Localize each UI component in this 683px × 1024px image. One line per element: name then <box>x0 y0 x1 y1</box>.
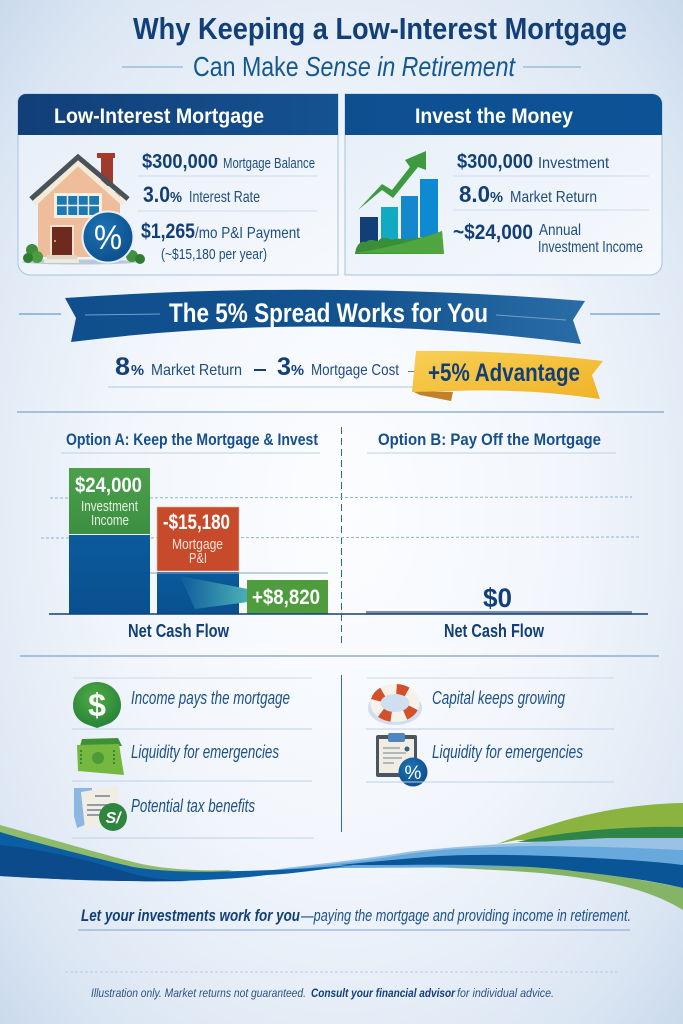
row: monthly payment: $1,265 <box>141 220 195 243</box>
panel heading: Low-Interest Mortgage <box>54 105 264 128</box>
bar: mortgage p&i: -$15,180 <box>163 511 230 534</box>
row: investment <box>457 151 609 173</box>
row: mortgage balance: Mortgage Balance <box>223 155 315 172</box>
row: monthly payment <box>141 220 300 263</box>
row: interest rate: % <box>170 189 182 206</box>
axis labels <box>128 621 545 641</box>
callout: +5% advantage <box>412 351 603 401</box>
bar: investment income: Income <box>91 512 129 529</box>
bar: net +$8,820 <box>247 580 328 614</box>
bar: mortgage p&i <box>157 507 248 614</box>
icon: life buoy <box>368 689 422 725</box>
axis labels: Net Cash Flow <box>444 621 545 641</box>
right upper green <box>497 803 683 844</box>
icon: clipboard with percent: % <box>405 763 422 784</box>
icon: house with percent badge: % <box>94 219 122 257</box>
dark blue <box>340 855 683 888</box>
bar: investment income <box>69 468 150 614</box>
benefit: liquidity for emergencies: Liquidity for emergencies <box>432 742 583 762</box>
footer disclaimer <box>91 986 554 1000</box>
row: annual investment income: ~$24,000 <box>453 221 533 244</box>
row: mortgage balance: $300,000 <box>142 151 218 173</box>
benefits: left column <box>72 678 314 838</box>
title: Why Keeping a Low-Interest Mortgage <box>133 11 627 46</box>
panel header <box>345 94 662 135</box>
panel header <box>18 94 338 135</box>
benefit: capital keeps growing: Capital keeps growing <box>432 688 565 708</box>
light blue <box>262 838 683 872</box>
benefit: income pays the mortgage: Income pays the mortgage <box>131 688 290 708</box>
row: market return: % <box>490 189 503 206</box>
icon: dollar bubble <box>73 682 121 728</box>
closing statement: Let your investments work for you <box>81 906 300 925</box>
icon: clipboard with percent <box>376 733 428 786</box>
icon: house with percent badge <box>22 153 145 264</box>
left blue <box>0 832 360 881</box>
chart: net cash flow option a <box>69 468 328 614</box>
row: annual investment income <box>453 221 643 256</box>
icon: cash stack <box>77 738 124 775</box>
row: annual investment income: Investment Income <box>538 239 643 256</box>
row: interest rate: Interest Rate <box>189 189 260 206</box>
closing statement <box>81 906 631 925</box>
spread formula: 8 <box>115 353 130 381</box>
row: market return: Market Return <box>510 189 597 206</box>
chart: net cash flow option b <box>366 583 632 614</box>
heading: option a: Option A: Keep the Mortgage & Invest <box>66 430 318 449</box>
footer disclaimer: Consult your financial advisor <box>311 986 456 1000</box>
row: mortgage balance <box>142 151 315 173</box>
spread formula <box>115 353 414 381</box>
row: annual investment income: Annual <box>539 222 581 239</box>
title block <box>122 11 627 82</box>
left green <box>0 825 233 876</box>
callout: +5% advantage: +5% Advantage <box>428 359 580 387</box>
banner: the 5% spread <box>19 290 660 344</box>
bar: investment income: $24,000 <box>75 474 142 497</box>
spread formula: 3 <box>277 353 291 381</box>
row: market return <box>459 181 597 207</box>
right lower green <box>350 864 683 910</box>
row: investment: Investment <box>538 155 609 172</box>
row: interest rate <box>143 182 260 207</box>
panel: invest the money <box>345 94 662 275</box>
row: monthly payment: (~$15,180 per year) <box>161 246 267 263</box>
bar: mortgage p&i: P&I <box>189 550 207 567</box>
panel: low-interest mortgage <box>18 94 338 275</box>
footer disclaimer: Illustration only. Market returns not guaranteed. <box>91 986 306 1000</box>
banner heading: The 5% Spread Works for You <box>169 298 488 328</box>
column headings <box>61 430 616 453</box>
row: market return: 8.0 <box>459 181 490 207</box>
spread formula: Market Return <box>151 362 242 379</box>
benefit: potential tax benefits: Potential tax benefits <box>131 796 255 816</box>
subtitle: Can Make Sense in Retirement <box>193 51 516 82</box>
wave decoration <box>0 803 683 910</box>
heading: option b: Option B: Pay Off the Mortgage <box>378 430 601 449</box>
icon: tax document <box>74 786 127 831</box>
icon: tax document: S/ <box>105 810 122 827</box>
row: investment: $300,000 <box>457 151 533 173</box>
row: interest rate: 3.0 <box>143 182 170 207</box>
benefits: right column <box>366 678 614 786</box>
bar: mortgage p&i: Mortgage <box>172 536 223 553</box>
spread formula: % <box>131 362 144 379</box>
icon: dollar bubble: $ <box>88 687 106 723</box>
spread formula: % <box>291 362 304 379</box>
panel heading: Invest the Money <box>415 105 573 128</box>
axis labels: Net Cash Flow <box>128 621 230 641</box>
bar: net +$8,820: +$8,820 <box>252 586 320 609</box>
row: monthly payment: /mo P&I Payment <box>195 225 300 242</box>
chart: net cash flow option b: $0 <box>483 583 512 613</box>
footer disclaimer: for individual advice. <box>457 986 554 1000</box>
bar: investment income: Investment <box>81 498 139 515</box>
icon: growth bar chart with arrow <box>355 151 444 254</box>
spread formula: Mortgage Cost <box>311 362 399 379</box>
benefit: liquidity for emergencies: Liquidity for emergencies <box>131 742 279 762</box>
